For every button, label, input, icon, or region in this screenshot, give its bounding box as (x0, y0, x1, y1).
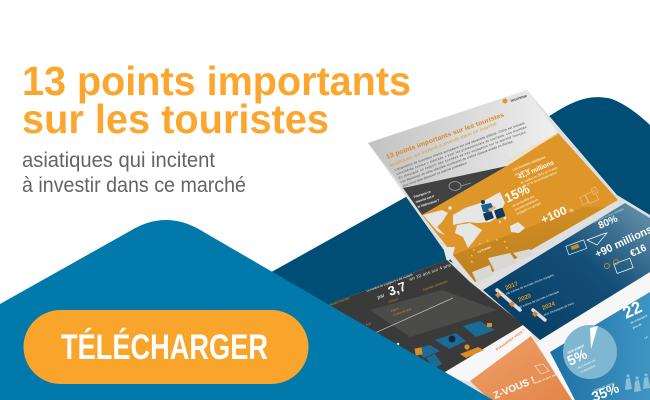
stat: 41.3 millions: soit 22 % de la fréquentation (521, 170, 558, 189)
brochure intro text: considérée comme « eldorado » pour les professionnels du tourisme. Les touristes (396, 125, 528, 176)
navy timeline panel (483, 203, 650, 340)
download button (24, 310, 308, 384)
stat: 22% (620, 297, 649, 340)
stat: par 3.7: Le nombre de voyageurs a été multiplié (366, 272, 414, 293)
brochure intro text: L'acquisition de nouveaux clients européens est une nécessité difficile. Chine est souvent (394, 121, 525, 172)
timeline: 2017: 2017 (505, 281, 520, 292)
darker fold band (453, 207, 606, 282)
dark triangle with question (403, 166, 507, 215)
stat: 22%: de croissance (630, 313, 648, 325)
stat: 22%: 22 (620, 297, 645, 323)
download button: TÉLÉCHARGER (61, 327, 268, 367)
dark panel icon tiles (397, 321, 495, 368)
EU stars: ★ (503, 239, 507, 244)
timeline: 2017: 100 millions de touristes chinois voyagent (505, 273, 554, 296)
stat: 41.3 millions: 41,3 millions (517, 159, 556, 181)
infographic brochure mockup (327, 90, 650, 400)
timeline: 2024 (532, 301, 575, 320)
stat: 15%: voyagent en groupe (516, 201, 542, 216)
EU stars (470, 237, 509, 264)
dark panel orange labels: Touristes asiatiques (422, 279, 449, 292)
panel label: Préssentez-vous ! (495, 328, 525, 352)
stat: 15%: touristes asiatiques (514, 197, 539, 212)
title (22, 58, 411, 142)
stat: 22%: plus de (632, 322, 642, 330)
orange call-to-action panel (470, 328, 572, 400)
timeline: 2024: 2024 (542, 301, 557, 312)
orange statistics panel (422, 131, 618, 283)
pie chart: 5%: un passeport (580, 363, 596, 374)
stat: par 3.7: par (377, 293, 386, 301)
stat: 41.3 millions: Les touristes asiatiques (512, 155, 547, 172)
skyscraper illustration (580, 187, 599, 205)
map caption: La France (477, 245, 492, 254)
paper buildings (472, 249, 533, 283)
world map (423, 192, 525, 262)
panel hand icon (535, 364, 549, 374)
brochure header panel (368, 90, 558, 188)
dark panel orange labels: Japon (390, 306, 399, 313)
EU stars: ★ (505, 245, 509, 250)
question text: Pourquoi ce (413, 190, 432, 199)
pie chart: 5%: des Chinois ont (577, 358, 596, 370)
EU stars: ★ (470, 259, 474, 264)
stat: 41.3 millions: ont généré (514, 167, 531, 177)
stat: 35% since 2012: DEPUIS 2012 (594, 382, 614, 393)
brochure intro text: En témoigne un rapport des données de ces voyageurs sur le marché français. (398, 130, 527, 180)
question text: marché est-il (415, 194, 435, 204)
stat: 41.3 millions (512, 155, 558, 189)
question text: si intéressant ? (417, 198, 440, 209)
title: 13 points importants (22, 58, 411, 104)
brochure logo (502, 93, 528, 104)
brochure white band lower (440, 272, 650, 400)
passenger icons (625, 373, 650, 392)
brochure intro text: Les dépenses de cette clientèle continuent de croître chaque année en Europe. (400, 139, 514, 184)
timeline: 2024: Jeux Olympiques de Paris (543, 301, 575, 317)
timeline: 2020: 150 millions de touristes à l'étranger (517, 289, 560, 310)
stat: par 3.7 (366, 262, 452, 301)
title: sur les touristes (22, 96, 329, 142)
dark panel orange labels: Chinois (388, 297, 399, 304)
stat: 15%: de la clientèle des (512, 194, 536, 208)
section label: Les touristes asiatiques et leurs voyages (577, 207, 625, 231)
EU stars: ★ (472, 247, 476, 252)
stat: 15%: 15% (502, 181, 532, 206)
EU stars: ★ (495, 237, 499, 242)
subtitle (22, 149, 246, 197)
pie chart: 5% (563, 325, 617, 379)
EU stars: ★ (478, 241, 482, 246)
pie chart: 5%: SEULEMENT (567, 343, 585, 355)
stat: 16: €16 (629, 243, 649, 260)
stat: +100%: +100 (539, 205, 569, 227)
dark panel (327, 260, 530, 375)
stat: par 3.7: en 10 ans sur 4 ans (409, 262, 452, 282)
dark panel orange labels (329, 279, 449, 327)
traveller icon (481, 200, 505, 221)
subtitle: asiatiques qui incitent (22, 149, 215, 172)
brochure logo: tourisme (510, 93, 528, 103)
magnifier icon (449, 182, 471, 190)
stat: +100%: % (568, 207, 575, 215)
dark panel orange labels: Corée du Sud (393, 307, 412, 317)
shaded centre block (370, 290, 497, 337)
dark panel timeline (375, 298, 453, 333)
pie chart: 5%: 5% (565, 345, 590, 369)
panel note: Juste un petit pas (534, 372, 558, 385)
stat: 80%: 80% (597, 214, 620, 232)
timeline: 2017 (495, 273, 554, 310)
timeline: 2020: 2020 (518, 293, 533, 304)
stat: 15% (502, 181, 542, 216)
stat: par 3.7: 3,7 (386, 279, 408, 299)
question text (413, 190, 440, 209)
stat: 41.3 millions: de nuitées en 2016 en France (520, 166, 558, 185)
plane and ticket icons (566, 233, 633, 273)
brochure intro text: pour vous faire découvrir ce marché prometteur (402, 161, 467, 188)
section heading: Les touristes asiatiques en France (505, 131, 559, 164)
dark panel orange labels: Autres marchés (329, 296, 351, 307)
brochure title: 13 points importants sur les touristes (385, 111, 506, 161)
teal-blue foreground mountain (0, 220, 493, 400)
EU stars: ★ (470, 253, 474, 258)
subtitle: à investir dans ce marché (22, 174, 246, 197)
navy background shape (250, 97, 650, 400)
brochure paper base (327, 90, 650, 400)
light blue statistics panel (550, 292, 650, 400)
stat: 22%: Le (644, 335, 649, 340)
EU stars: ★ (486, 238, 490, 243)
dark panel orange labels: Asie (365, 321, 372, 327)
brochure subtitle: asiatiques qui incitent à investir dans ce marché (389, 121, 498, 168)
